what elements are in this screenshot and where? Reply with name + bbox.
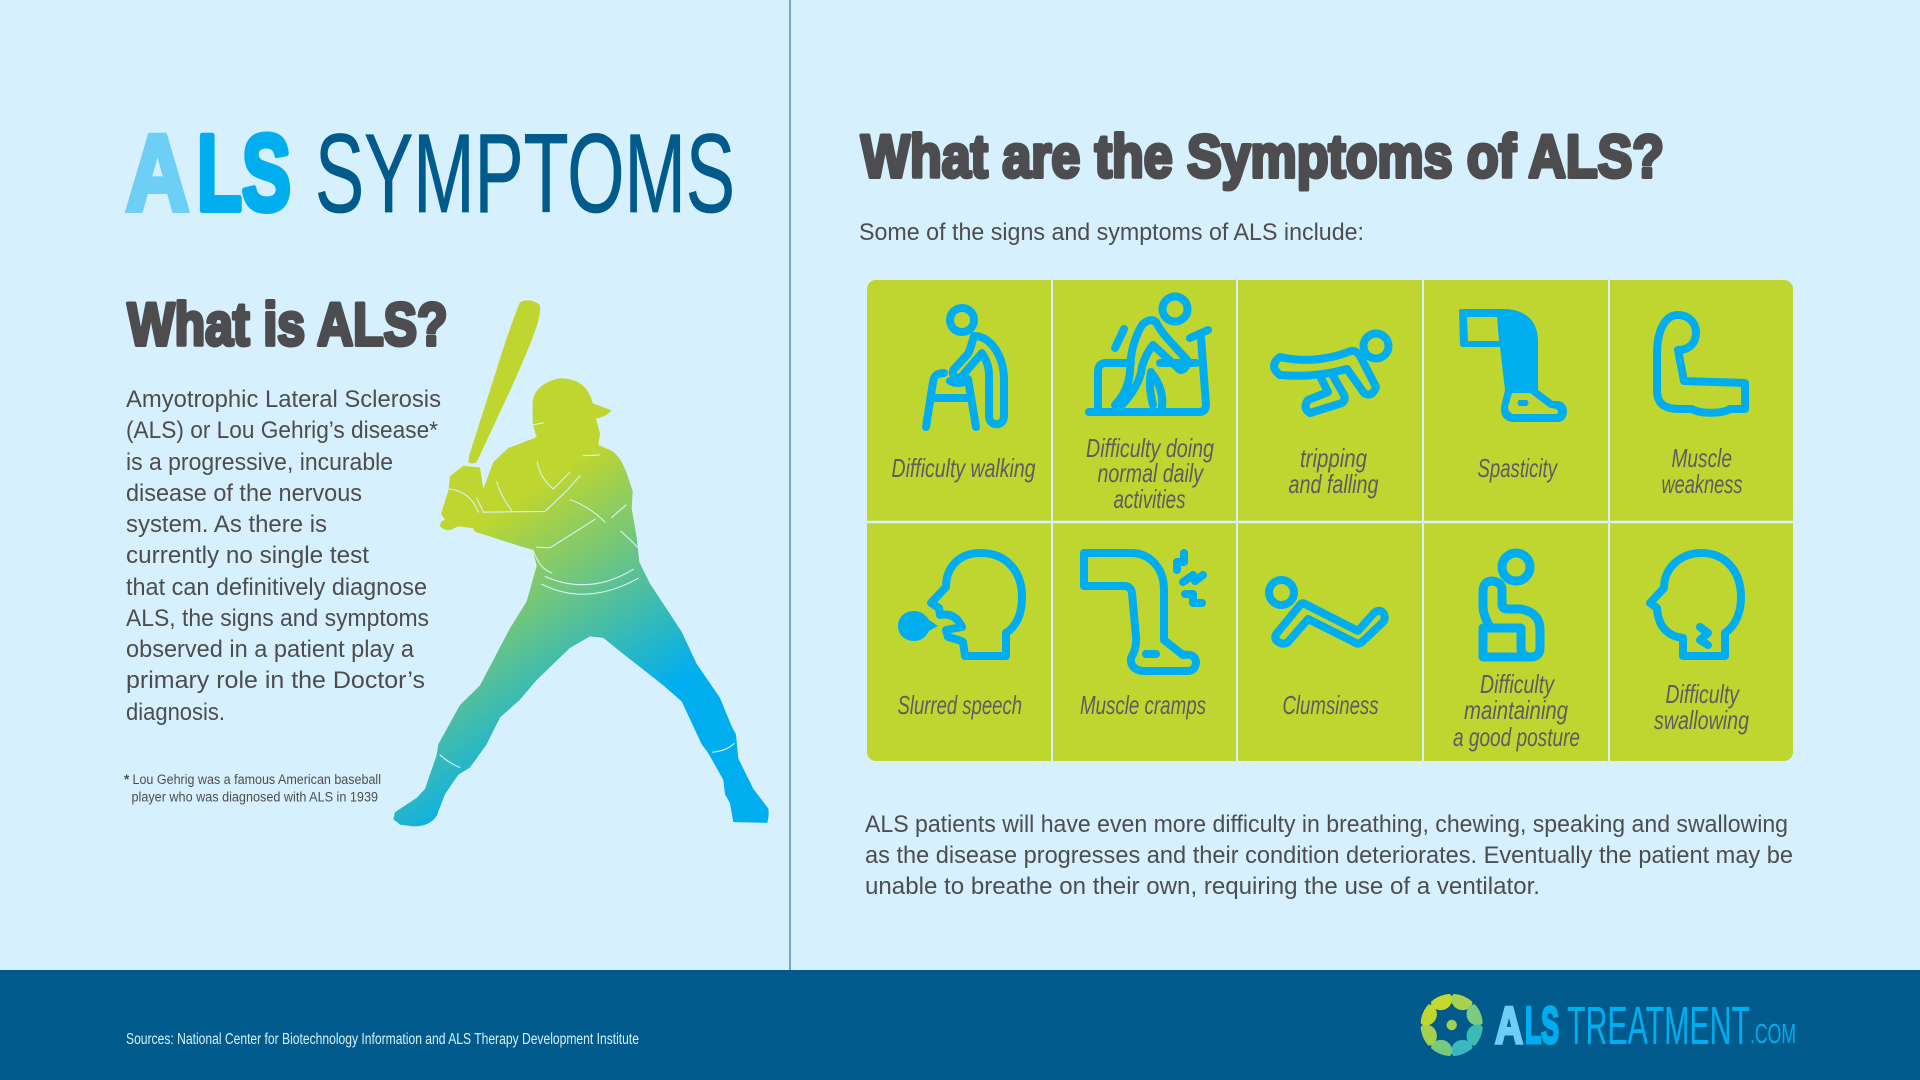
symptom: difficulty maintaining a good posture: maintaining	[1464, 695, 1568, 725]
logo wordmark	[1495, 996, 1796, 1056]
text block: ALS description: observed in a patient play a	[126, 636, 414, 663]
icon: baseball batter silhouette	[393, 300, 769, 826]
text block: ALS description: (ALS) or Lou Gehrig’s disease*	[126, 417, 438, 444]
symptom: tripping and falling: and falling	[1288, 469, 1379, 499]
text block: disease progression: ALS patients will have even more difficulty in breathing, chewing, speaking and swallowing	[865, 811, 1788, 838]
footnote	[124, 772, 381, 804]
panel: symptoms	[859, 123, 1793, 900]
symptom: muscle weakness: weakness	[1662, 469, 1742, 499]
heading: what is ALS: What is ALS?	[128, 291, 448, 358]
footer band	[0, 970, 1920, 1080]
logo wordmark: TREATMENT	[1567, 996, 1750, 1056]
symptom: tripping and falling	[1274, 334, 1388, 499]
symptom: tripping and falling: tripping	[1300, 443, 1367, 473]
symptom: difficulty doing normal daily activities: normal daily	[1098, 458, 1205, 488]
footnote: *	[124, 772, 130, 787]
text block: ALS description: primary role in the Doctor’s	[126, 667, 425, 694]
symptom: difficulty doing normal daily activities: activities	[1114, 484, 1186, 514]
symptom: difficulty doing normal daily activities: Difficulty doing	[1086, 433, 1214, 463]
symptom: spasticity: Spasticity	[1478, 453, 1558, 483]
symptom: muscle cramps	[1080, 553, 1206, 720]
symptom: muscle weakness: Muscle	[1672, 443, 1732, 473]
text block: ALS description: Amyotrophic Lateral Sclerosis	[126, 386, 441, 413]
symptom: muscle weakness	[1657, 315, 1745, 499]
title	[126, 111, 735, 236]
logo wordmark: .COM	[1750, 1018, 1796, 1049]
symptom: slurred speech	[898, 553, 1022, 720]
symptom: clumsiness: Clumsiness	[1282, 690, 1378, 720]
text block: ALS description	[126, 386, 441, 726]
symptom: difficulty walking: Difficulty walking	[892, 453, 1036, 483]
symptom: difficulty swallowing: Difficulty	[1666, 679, 1740, 709]
symptom: difficulty maintaining a good posture: Difficulty	[1480, 669, 1555, 699]
text block: ALS description: system. As there is	[126, 511, 327, 538]
text block: intro: Some of the signs and symptoms of ALS include:	[859, 219, 1364, 246]
symptom: difficulty maintaining a good posture	[1453, 553, 1580, 752]
symptom: clumsiness	[1269, 580, 1385, 720]
title: LS	[197, 112, 291, 233]
panel: what is ALS	[124, 291, 448, 804]
logo wordmark: A	[1495, 997, 1523, 1055]
text block: ALS description: is a progressive, incurable	[126, 449, 393, 476]
footnote: player who was diagnosed with ALS in 1939	[132, 790, 378, 804]
sources: Sources: National Center for Biotechnology Information and ALS Therapy Development Institute	[126, 1031, 639, 1048]
text block: ALS description: diagnosis.	[126, 699, 225, 726]
footnote: Lou Gehrig was a famous American baseball	[132, 772, 381, 787]
symptom: difficulty swallowing: swallowing	[1654, 705, 1749, 735]
symptom: muscle cramps: Muscle cramps	[1080, 690, 1206, 720]
text block: disease progression	[865, 811, 1793, 900]
title: A	[126, 112, 189, 233]
text block: ALS description: ALS, the signs and symptoms	[126, 605, 429, 632]
logo: ALS Treatment	[1419, 992, 1796, 1058]
icon: logo ring	[1419, 992, 1485, 1058]
symptom: difficulty doing normal daily activities	[1086, 296, 1214, 514]
symptom: difficulty swallowing	[1650, 553, 1749, 735]
symptom: difficulty maintaining a good posture: a good posture	[1453, 722, 1580, 752]
text block: disease progression: as the disease progresses and their condition deteriorates. Eventually the patient may be	[865, 842, 1793, 869]
heading: what are the symptoms: What are the Symptoms of ALS?	[861, 123, 1664, 190]
symptom grid background	[867, 280, 1793, 761]
text block: ALS description: disease of the nervous	[126, 480, 362, 507]
text block: disease progression: unable to breathe on their own, requiring the use of a ventilator.	[865, 873, 1540, 900]
symptom: spasticity	[1459, 309, 1567, 483]
text block: ALS description: that can definitively diagnose	[126, 574, 427, 601]
symptom: difficulty walking	[892, 308, 1036, 483]
text block: ALS description: currently no single test	[126, 542, 369, 569]
title: SYMPTOMS	[315, 111, 735, 236]
symptom: slurred speech: Slurred speech	[898, 690, 1022, 720]
logo wordmark: LS	[1525, 997, 1559, 1055]
